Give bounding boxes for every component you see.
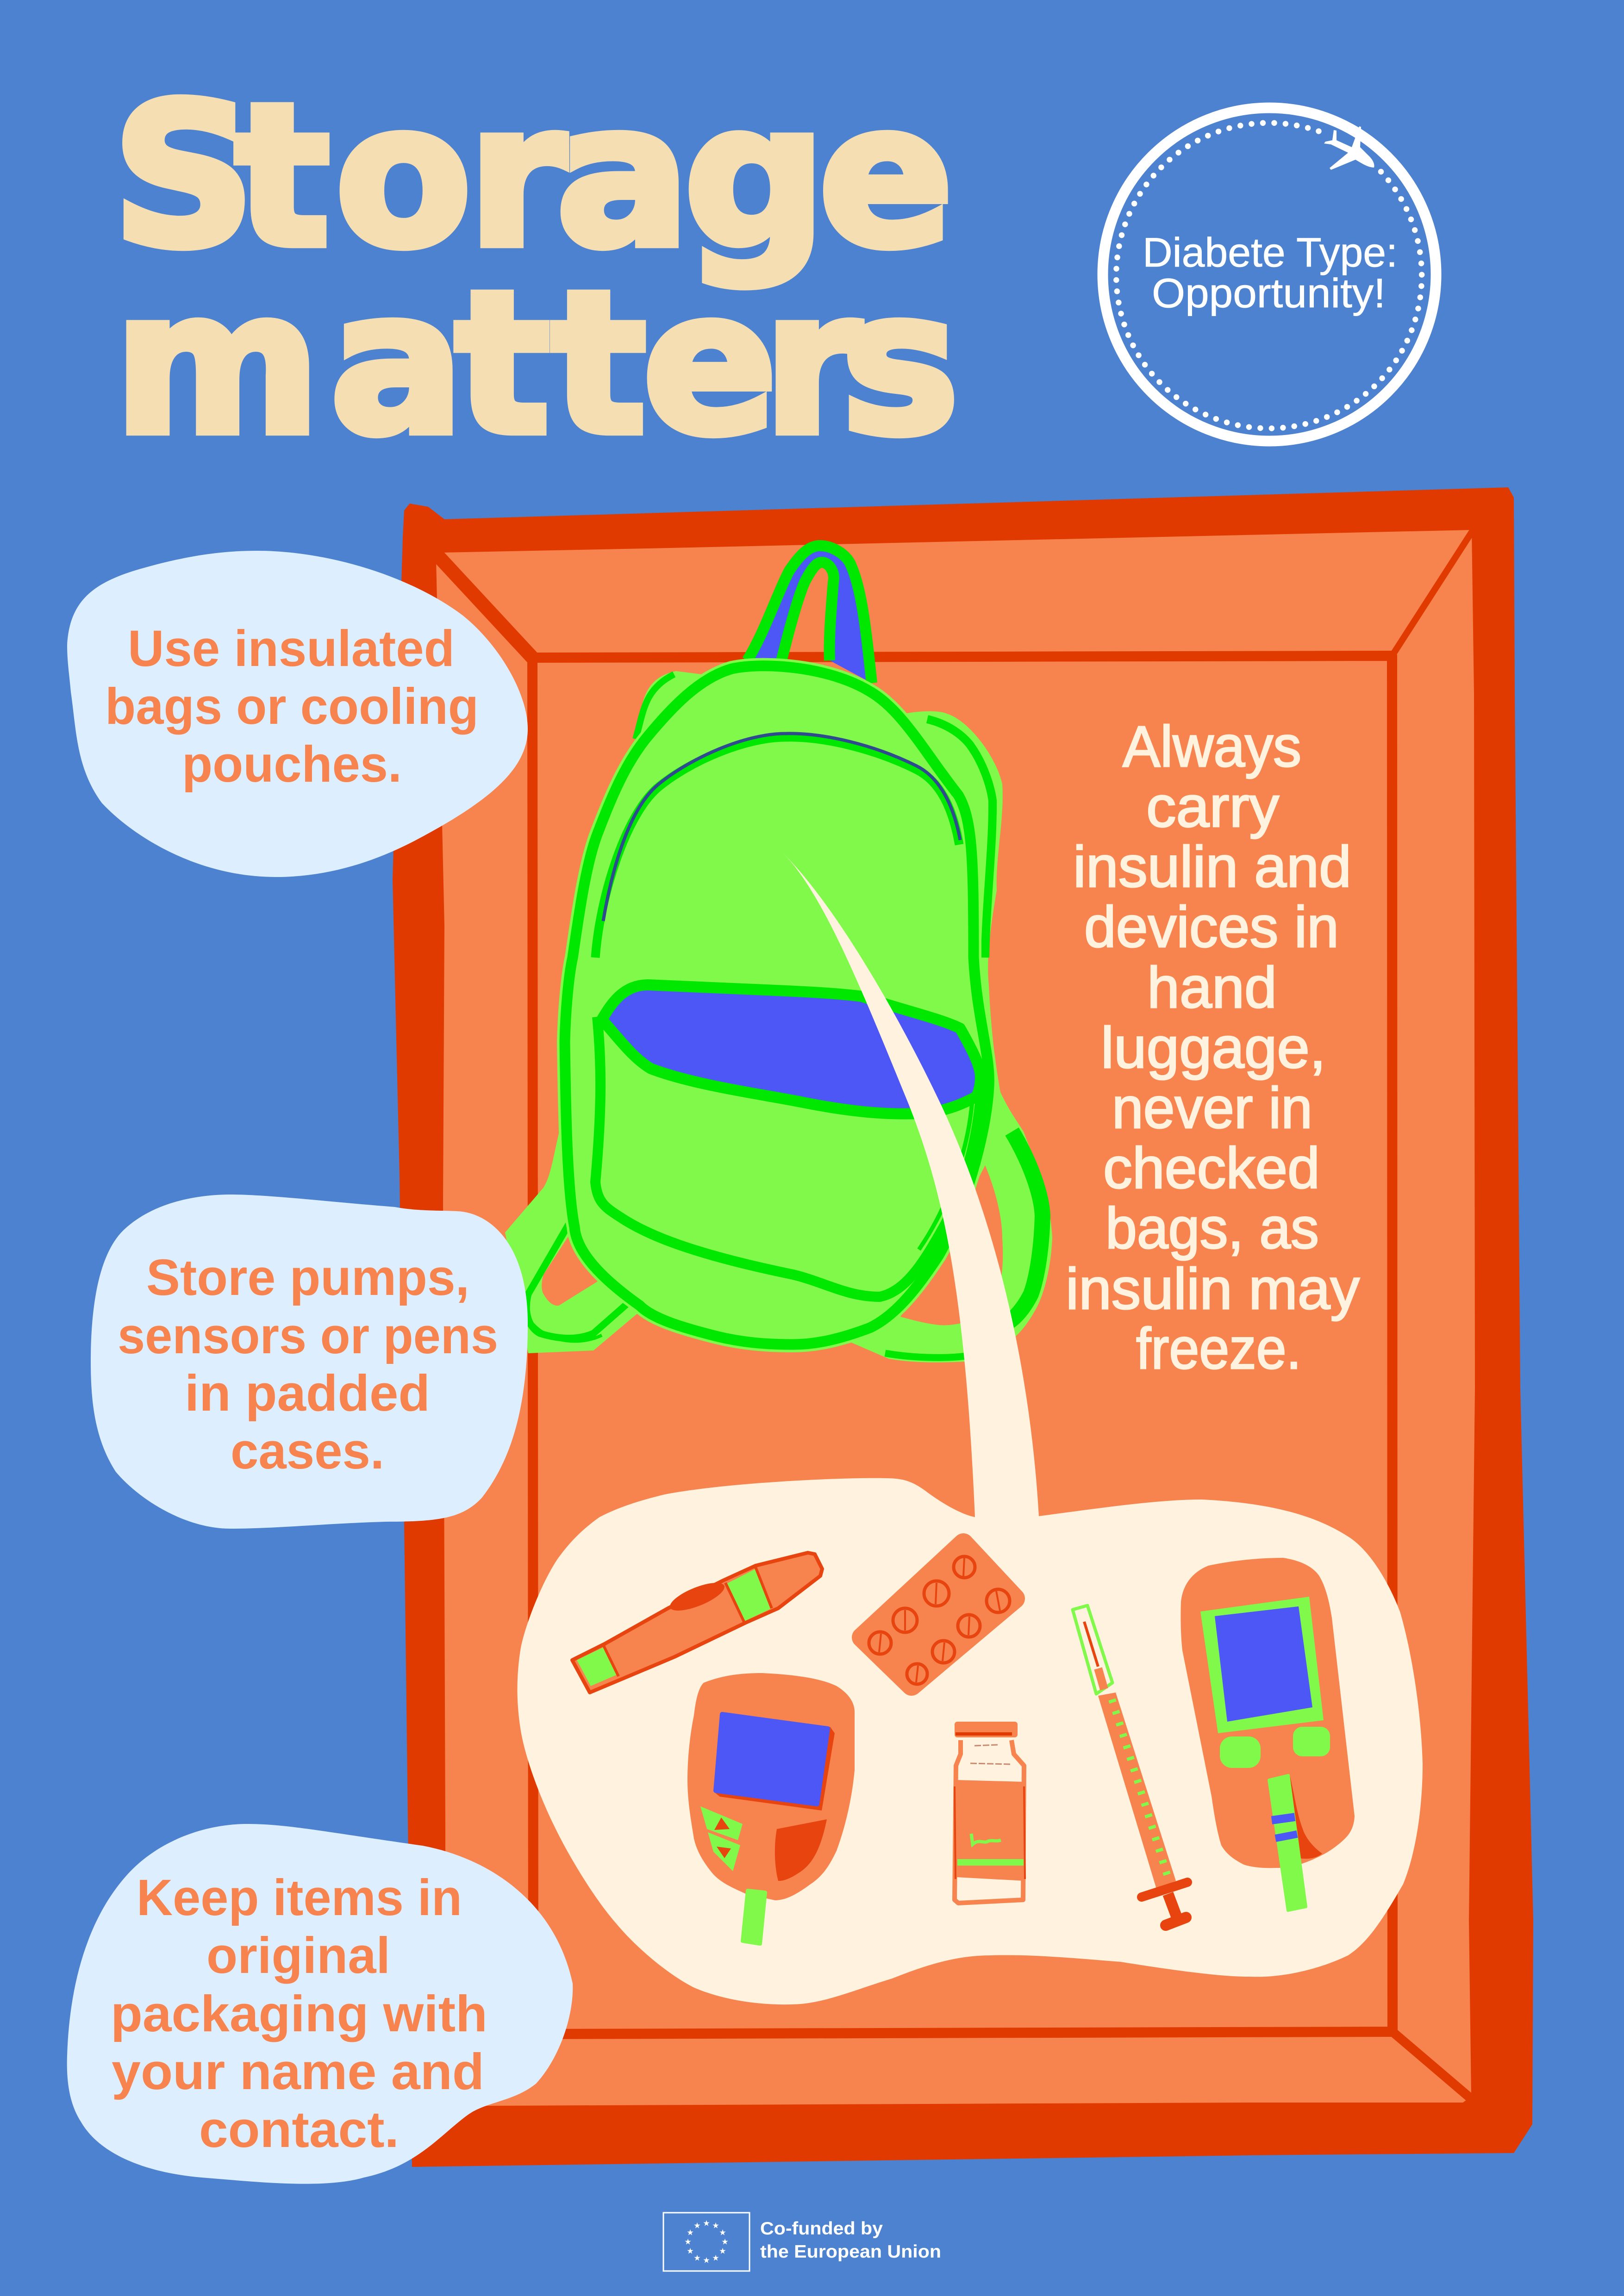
- icon: insulin vial: [955, 1722, 1025, 1903]
- icon: syringe: [1073, 1605, 1187, 1925]
- text: carry in hand luggage: devices in: [1084, 895, 1339, 959]
- panel: padded cases tip: cases.: [231, 1423, 384, 1480]
- text: carry in hand luggage: carry: [1146, 775, 1280, 839]
- panel: original packaging tip: [67, 1824, 573, 2184]
- panel: insulated bags tip: Use insulated: [128, 620, 455, 677]
- text: carry in hand luggage: [1066, 715, 1360, 1381]
- panel: padded cases tip: sensors or pens: [118, 1307, 498, 1364]
- panel: original packaging tip: original: [206, 1927, 390, 1984]
- icon: blister pack: [862, 1543, 1015, 1686]
- logo: EU co-funded: the European Union: [760, 2242, 941, 2262]
- panel: tray frame: [393, 487, 1533, 2167]
- title: [112, 62, 959, 478]
- illustration: backpack: [505, 546, 1052, 1363]
- panel: original packaging tip: Keep items in: [137, 1869, 462, 1926]
- badge: Diabete Type Opportunity: Opportunity!: [1152, 270, 1386, 316]
- text: carry in hand luggage: never in: [1112, 1076, 1312, 1140]
- backpack left strap: [505, 1132, 643, 1353]
- text: carry in hand luggage: insulin and: [1073, 835, 1351, 899]
- panel: insulated bags tip: bags or cooling: [105, 678, 479, 735]
- logo: EU co-funded: Co-funded by: [760, 2219, 883, 2239]
- backpack handle: [747, 546, 872, 683]
- icon: lancet pen: [572, 1553, 822, 1692]
- backpack body: [565, 666, 989, 1344]
- panel: original packaging tip: your name and: [112, 2043, 484, 2100]
- text: carry in hand luggage: checked: [1103, 1136, 1320, 1201]
- panel: padded cases tip: in padded: [185, 1365, 430, 1422]
- text: carry in hand luggage: Always: [1123, 715, 1301, 779]
- icon: second glucose meter: [1181, 1558, 1355, 1910]
- backpack lower seam: [595, 1017, 981, 1297]
- panel: padded cases tip: Store pumps,: [146, 1249, 469, 1306]
- logo: EU co-funded: [663, 2213, 941, 2271]
- backpack zipper: [595, 734, 960, 958]
- bubble with pointer: [518, 852, 1423, 2004]
- text: carry in hand luggage: insulin may: [1066, 1257, 1360, 1321]
- panel: insulated bags tip: [67, 551, 528, 877]
- backpack top-left lobe: [636, 671, 713, 745]
- icon: glucose meter with blue screen: [687, 1673, 855, 1944]
- text: carry in hand luggage: bags, as: [1106, 1196, 1319, 1261]
- text: carry in hand luggage: freeze.: [1136, 1317, 1301, 1381]
- badge: Diabete Type Opportunity: Diabete Type:: [1143, 229, 1398, 275]
- title: matters: [114, 250, 959, 478]
- text: carry in hand luggage: hand: [1147, 956, 1277, 1020]
- panel: original packaging tip: packaging with: [111, 1985, 487, 2042]
- title: Storage: [112, 62, 953, 290]
- callout: travel items bubble: [518, 852, 1423, 2004]
- panel: original packaging tip: contact.: [199, 2101, 399, 2158]
- backpack front pocket: [602, 985, 981, 1114]
- text: carry in hand luggage: luggage,: [1101, 1016, 1326, 1080]
- backpack right strap: [843, 711, 1052, 1363]
- badge: Diabete Type Opportunity: [1103, 108, 1436, 441]
- panel: padded cases tip: [91, 1195, 528, 1529]
- panel: insulated bags tip: pouches.: [182, 736, 402, 793]
